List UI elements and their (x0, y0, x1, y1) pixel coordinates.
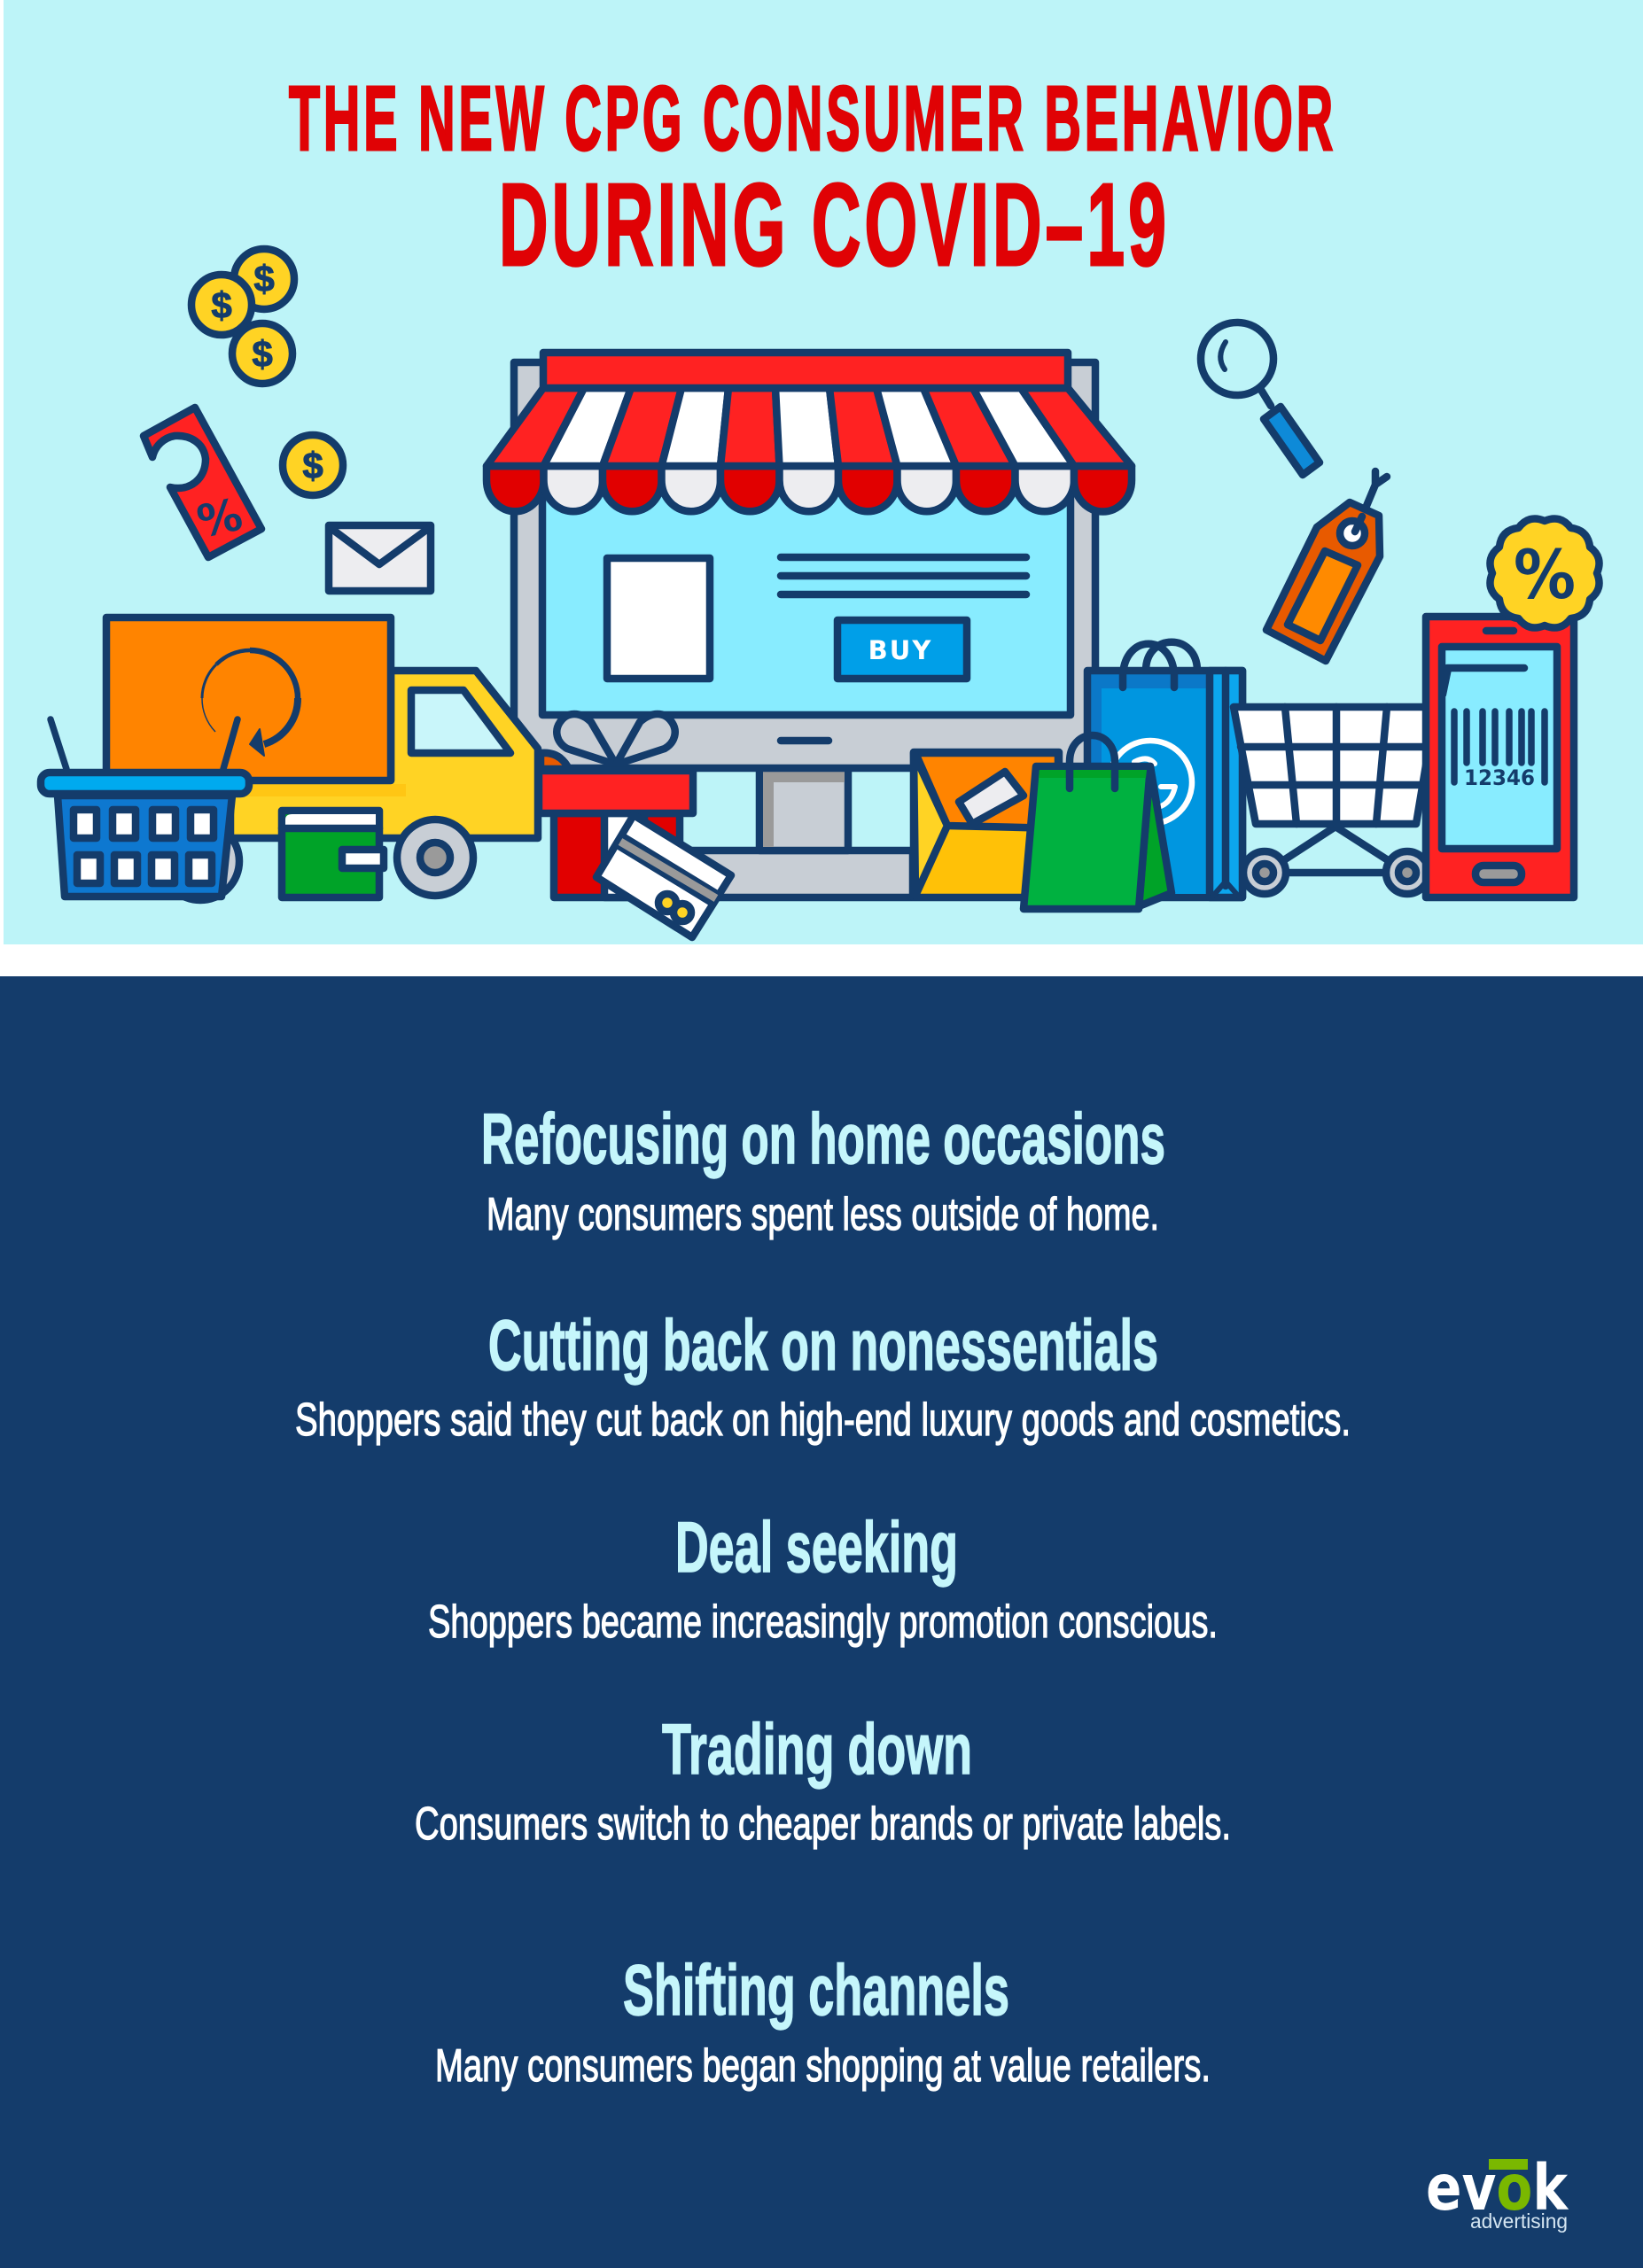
circular arrow on truck (202, 650, 298, 756)
text block: refocusing on home occasions: Refocusing on home occasions (481, 1099, 1165, 1179)
icon: smartphone with barcode: 12346 (1464, 765, 1535, 790)
icon: stack of coins: $ (253, 258, 275, 299)
text block: trading down: Consumers switch to cheaper brands or private labels. (415, 1798, 1231, 1850)
product image placeholder (607, 558, 710, 679)
icon: shopping cart (1234, 707, 1436, 894)
icon: parcel box (914, 752, 1059, 897)
buy button (837, 620, 967, 679)
barcode (1454, 711, 1545, 782)
title: DURING COVID–19 (499, 159, 1170, 290)
icon: price tag (1266, 471, 1387, 661)
icon: green shopping bag (1024, 735, 1172, 909)
icon: credit card (596, 815, 731, 937)
text block: shifting channels (435, 1951, 1211, 2092)
icon: percent badge (1490, 518, 1600, 628)
icon: percent badge: % (1514, 535, 1576, 614)
icon: stack of coins: $ (211, 284, 232, 326)
icon: envelope (329, 525, 431, 591)
icon: delivery truck (106, 617, 569, 900)
logo: evok advertising: advertising (1470, 2210, 1568, 2233)
panel: illustrated header background (4, 0, 1643, 944)
icon: single coin (283, 435, 343, 495)
title (289, 67, 1336, 290)
icon: stack of coins (191, 249, 294, 384)
text block: trading down (415, 1710, 1231, 1850)
icon: gift box (539, 714, 693, 897)
monitor body (514, 362, 1095, 768)
text block: shifting channels: Shifting channels (623, 1951, 1009, 2031)
icon: single coin: $ (302, 445, 323, 486)
icon: door hanger discount tag: % (192, 488, 247, 548)
text block: deal seeking: Shoppers became increasingly promotion conscious. (428, 1596, 1218, 1648)
icon: door hanger discount tag (144, 408, 261, 557)
icon: magnifying glass (1201, 322, 1320, 475)
monitor stand and base (674, 768, 913, 897)
icon: smartphone with barcode (1426, 617, 1574, 897)
icon: computer storefront (487, 353, 1132, 897)
product text lines (781, 557, 1026, 594)
icon: stack of coins: $ (252, 333, 273, 375)
icon: blue shopping bag (1087, 642, 1242, 897)
text block: cutting back on nonessentials (295, 1306, 1351, 1446)
awning (487, 353, 1132, 512)
text block: deal seeking: Deal seeking (675, 1508, 958, 1588)
icon: shopping basket (41, 719, 249, 897)
icon: wallet (282, 811, 384, 897)
text block: cutting back on nonessentials: Cutting back on nonessentials (488, 1306, 1158, 1386)
text block: refocusing on home occasions: Many consumers spent less outside of home. (487, 1189, 1159, 1240)
panel: navy text section background (0, 976, 1643, 2268)
text block: refocusing on home occasions (481, 1099, 1165, 1240)
text block: trading down: Trading down (662, 1710, 972, 1790)
monitor button (781, 737, 829, 744)
text block: shifting channels: Many consumers began shopping at value retailers. (435, 2040, 1211, 2092)
buy button: BUY (868, 635, 932, 665)
monitor screen (542, 443, 1071, 715)
logo: evok advertising: evok (1426, 2151, 1569, 2225)
text block: deal seeking (428, 1508, 1218, 1648)
